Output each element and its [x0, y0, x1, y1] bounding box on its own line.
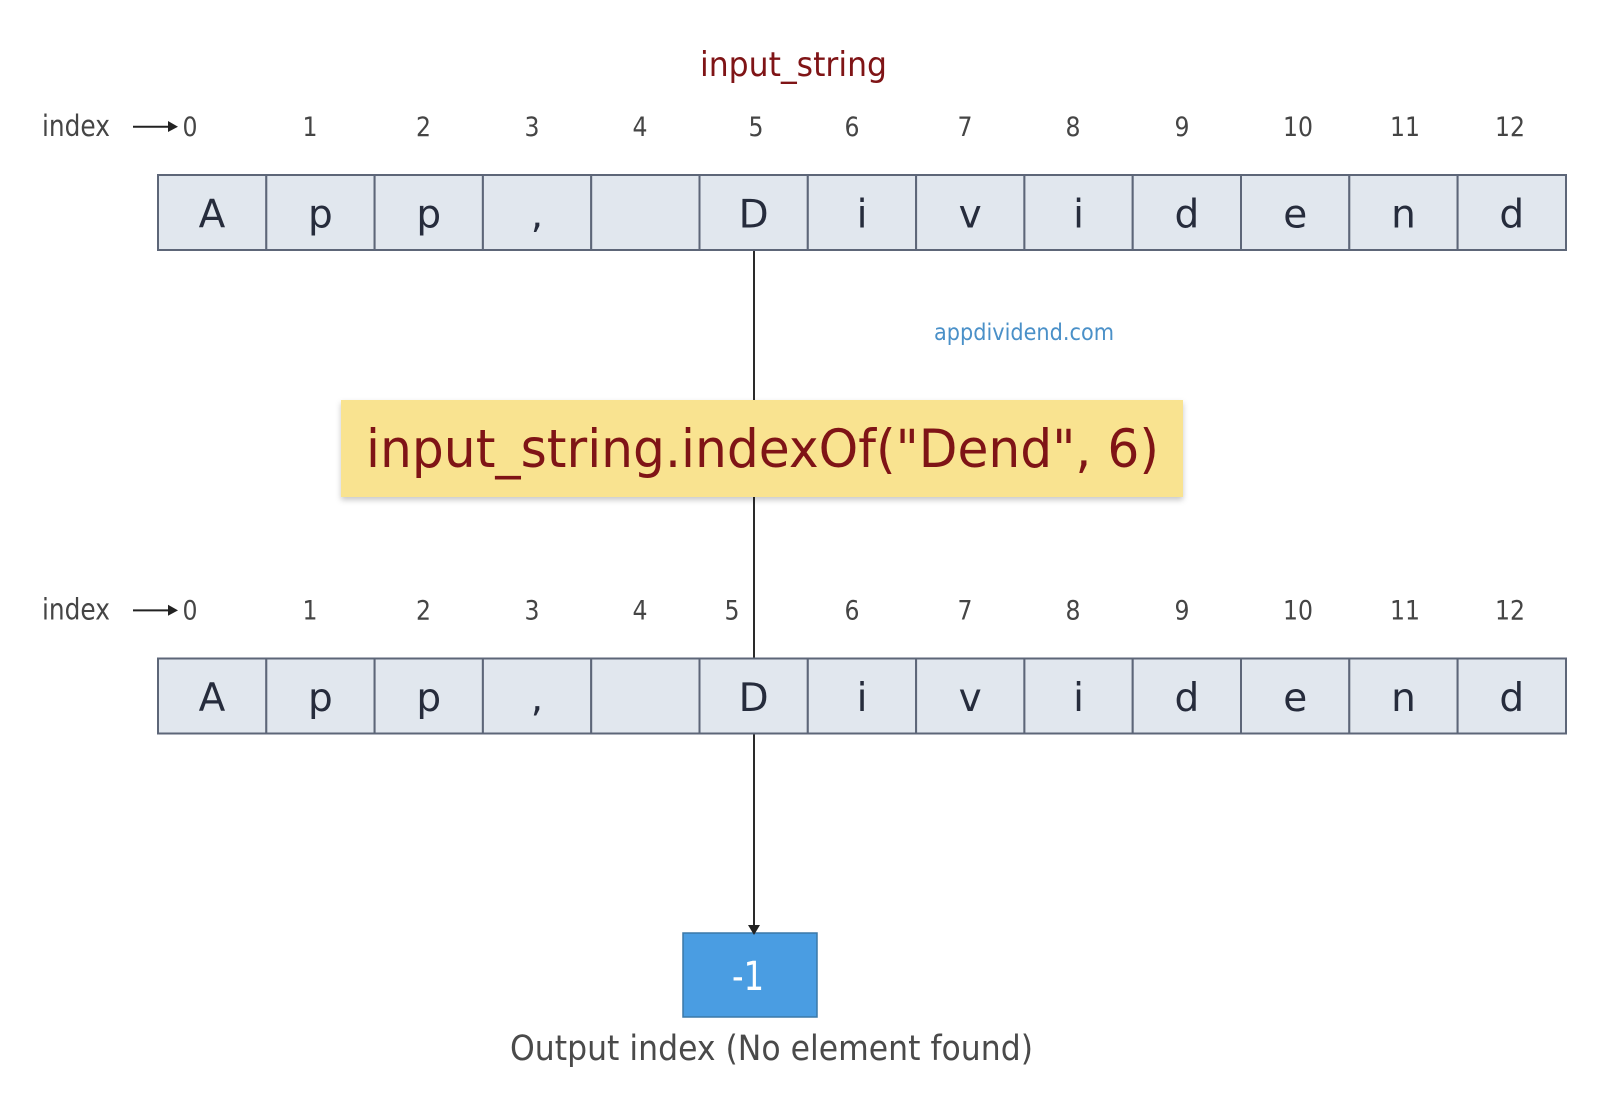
- index numbers: [182, 112, 1525, 143]
- method call box: input_string.indexOf("Dend", 6): [366, 419, 1159, 480]
- output box: -1: [683, 933, 817, 1017]
- index numbers: [182, 596, 1525, 627]
- top character array: [158, 175, 1566, 250]
- bottom character array: D: [739, 676, 769, 721]
- bottom character array: i: [1073, 676, 1084, 721]
- top character array: D: [739, 192, 769, 238]
- title: input_string: input_string: [700, 45, 887, 85]
- arrowhead into output box: [748, 925, 760, 935]
- connector line from top array to output: [753, 250, 755, 926]
- bottom character array: v: [959, 676, 982, 721]
- bottom character array: d: [1175, 676, 1199, 721]
- index label: index: [42, 593, 110, 627]
- index arrow: [133, 605, 178, 616]
- index numbers: 2: [416, 112, 431, 143]
- index numbers: 1: [302, 112, 318, 143]
- index numbers: 12: [1495, 112, 1525, 143]
- index label: index: [42, 109, 110, 143]
- top character array: e: [1283, 192, 1307, 238]
- top character array: p: [308, 192, 333, 238]
- index numbers: 9: [1174, 596, 1190, 627]
- index numbers: 6: [844, 596, 860, 627]
- bottom character array: A: [199, 676, 226, 721]
- bottom character array: e: [1283, 676, 1307, 721]
- index numbers: 3: [524, 112, 540, 143]
- index numbers: 2: [416, 596, 431, 627]
- index numbers: 0: [182, 112, 198, 143]
- index numbers: 5: [724, 596, 740, 627]
- index numbers: 4: [632, 596, 648, 627]
- index numbers: 5: [748, 112, 764, 143]
- bottom character array: n: [1391, 676, 1416, 721]
- index numbers: 10: [1283, 112, 1313, 143]
- top character array: d: [1499, 192, 1524, 238]
- index numbers: 12: [1495, 596, 1525, 627]
- top character array: p: [416, 192, 441, 238]
- bottom character array: p: [416, 676, 441, 721]
- top index row: [42, 109, 1525, 143]
- index numbers: 8: [1066, 112, 1080, 143]
- index numbers: 4: [632, 112, 648, 143]
- output caption: Output index (No element found): [510, 1029, 1033, 1069]
- top character array: i: [857, 192, 867, 238]
- index numbers: 11: [1390, 596, 1420, 627]
- index numbers: 7: [958, 596, 972, 627]
- index numbers: 10: [1283, 596, 1313, 627]
- index numbers: 0: [182, 596, 198, 627]
- top character array: i: [1073, 192, 1084, 238]
- index arrow: [133, 121, 178, 132]
- top character array: v: [959, 192, 982, 238]
- index numbers: 7: [958, 112, 972, 143]
- index numbers: 8: [1066, 596, 1080, 627]
- index numbers: 3: [524, 596, 540, 627]
- top character array: d: [1175, 192, 1199, 238]
- top character array: ,: [531, 192, 543, 238]
- bottom character array: i: [857, 676, 867, 721]
- index numbers: 6: [844, 112, 860, 143]
- watermark: appdividend.com: appdividend.com: [934, 320, 1114, 346]
- top character array: n: [1391, 192, 1416, 238]
- bottom index row: [42, 593, 1525, 627]
- index numbers: 9: [1174, 112, 1190, 143]
- output box: -1: -1: [732, 954, 764, 1000]
- top character array: A: [199, 192, 226, 238]
- index numbers: 11: [1390, 112, 1420, 143]
- bottom character array: p: [308, 676, 333, 721]
- index numbers: 1: [302, 596, 318, 627]
- bottom character array: ,: [531, 676, 543, 721]
- bottom character array: [158, 658, 1566, 734]
- method call box: [341, 400, 1183, 497]
- bottom character array: d: [1499, 676, 1524, 721]
